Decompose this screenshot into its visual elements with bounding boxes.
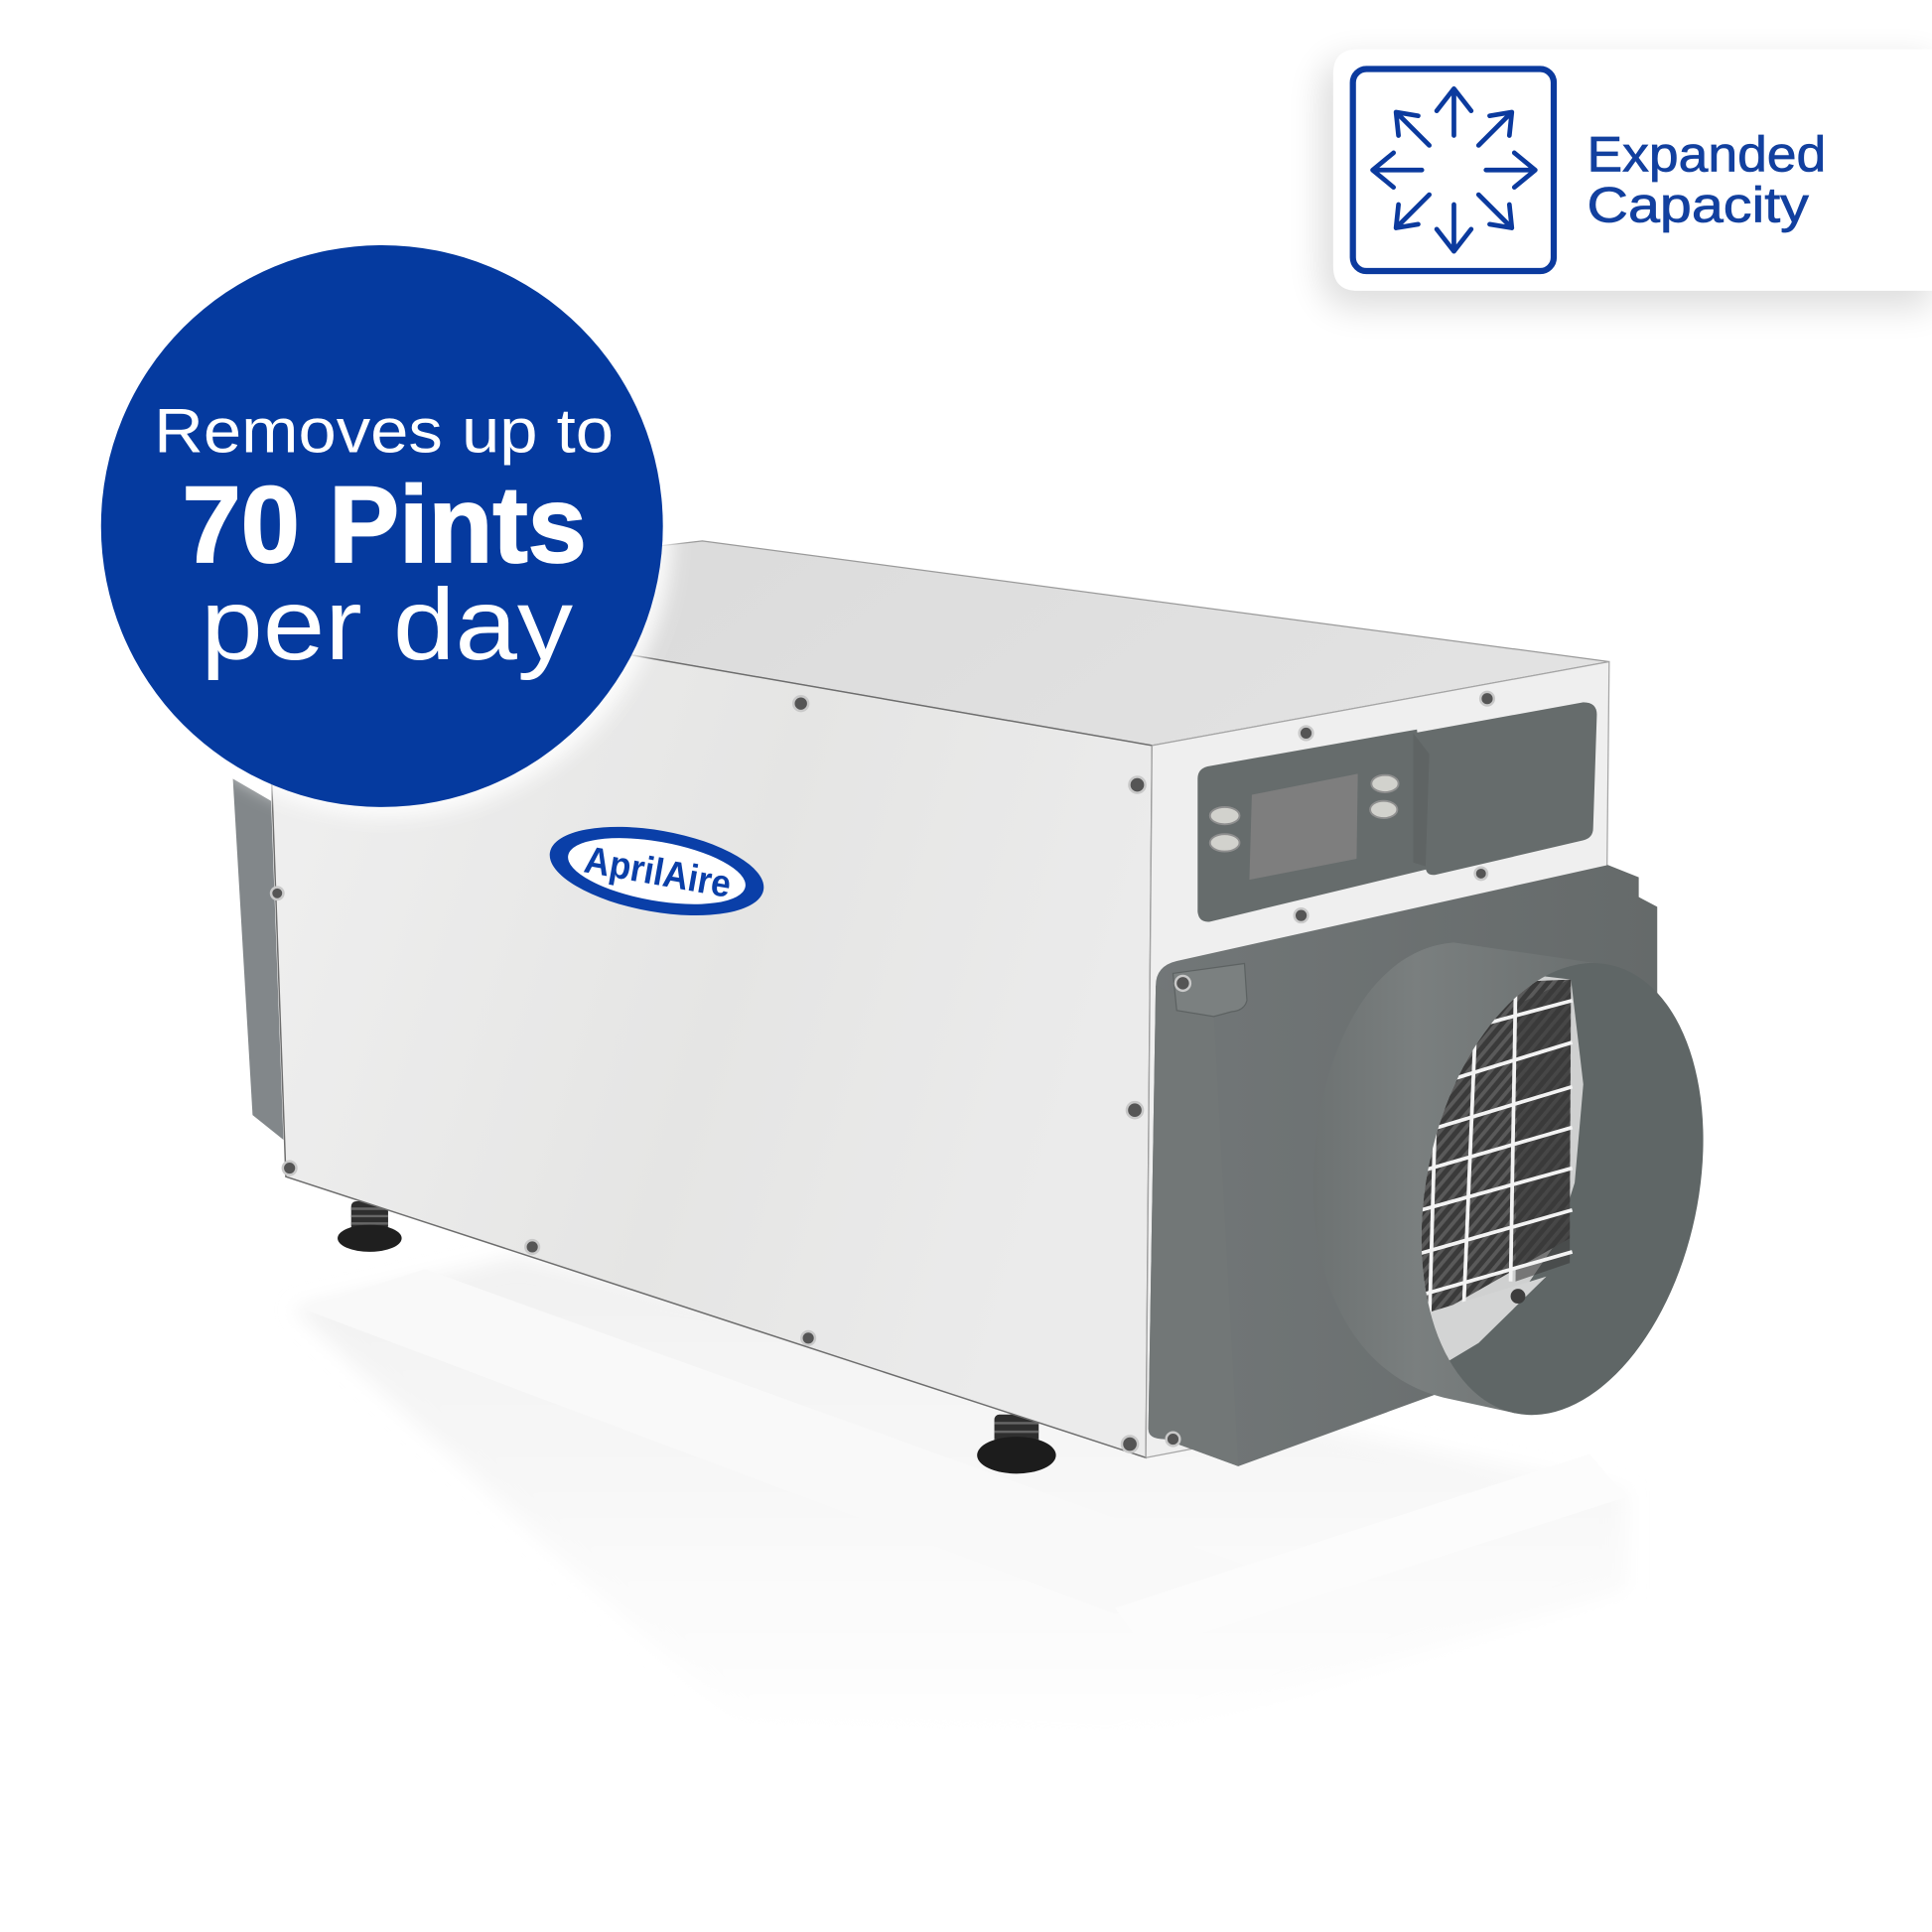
round duct collar (1372, 943, 1704, 1416)
card label: Expanded (1587, 127, 1826, 183)
badge line 3: per day (201, 568, 573, 681)
duct screw (1511, 1289, 1525, 1304)
adjustable foot: right (977, 1415, 1056, 1473)
control panel (1197, 730, 1430, 921)
badge line 2: 70 Pints (183, 465, 587, 586)
adjustable foot: left (338, 1201, 402, 1252)
card label: Capacity (1587, 177, 1809, 232)
icon: expanding arrows (1353, 69, 1554, 271)
feature card: expanded capacity (1320, 50, 1932, 308)
front face (265, 592, 1152, 1457)
filter grille seen through duct (1417, 961, 1584, 1361)
control cover (1414, 702, 1596, 875)
callout: 70 pints badge (101, 245, 673, 817)
panel screws (271, 692, 1494, 1452)
floor reflection (293, 1257, 1626, 1749)
badge line 1: Removes up to (154, 396, 614, 466)
display screen (1249, 773, 1358, 880)
gray duct housing (1149, 865, 1657, 1466)
mounting notch (1173, 964, 1247, 1017)
left side vent panel (233, 778, 283, 1140)
end face (1146, 661, 1609, 1457)
top face (265, 541, 1609, 746)
logo (543, 812, 770, 930)
logo: AprilAire (581, 839, 735, 906)
dehumidifier unit (233, 541, 1742, 1473)
product infographic canvas (101, 49, 1932, 1473)
buttons (1210, 775, 1399, 852)
